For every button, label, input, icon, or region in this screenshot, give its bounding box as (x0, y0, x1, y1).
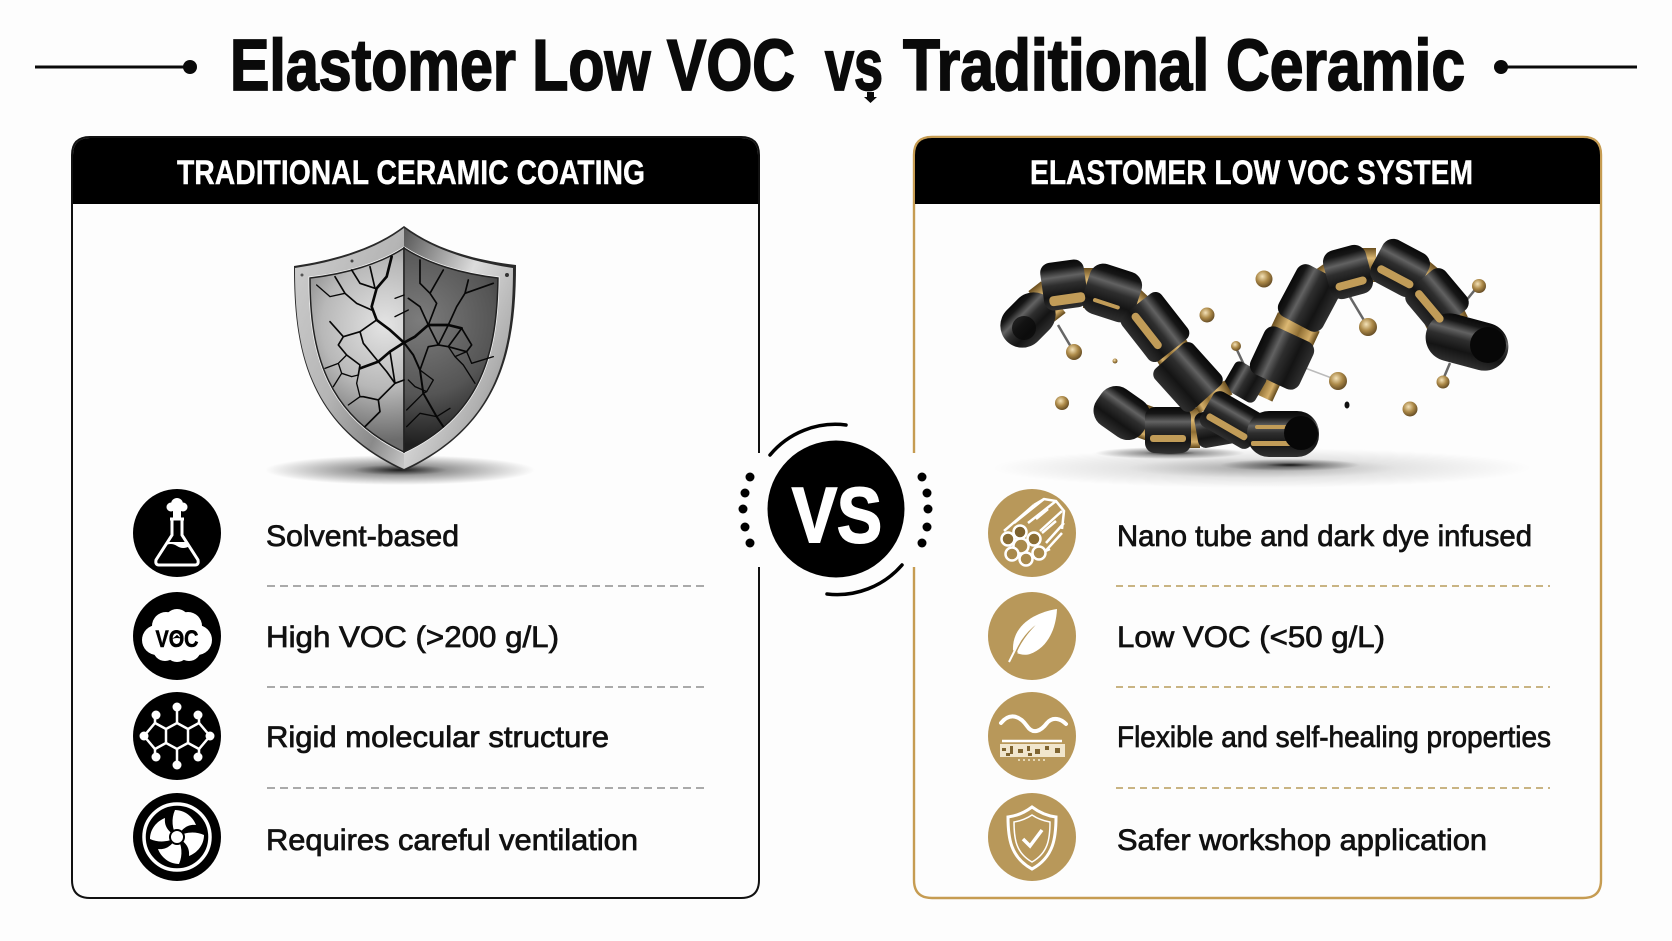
panel header: elastomer (915, 138, 1600, 204)
row: high voc: High VOC (>200 g/L) (266, 621, 559, 654)
title: Traditional Ceramic (903, 26, 1465, 106)
row: solvent-based (133, 489, 459, 577)
vs badge (738, 424, 932, 595)
icon: nano tube bundle (988, 489, 1076, 577)
divider (267, 585, 705, 587)
icon: shield check (988, 793, 1076, 881)
row: low voc (988, 592, 1385, 680)
divider (1116, 585, 1550, 587)
right chain necks (1132, 248, 1468, 448)
title (230, 26, 1465, 106)
row: requires careful ventilation (133, 793, 638, 881)
row: rigid molecular structure: Rigid molecular structure (266, 721, 609, 754)
row: flexible and self-healing (988, 692, 1551, 780)
icon: leaf (988, 592, 1076, 680)
row: low voc: Low VOC (<50 g/L) (1117, 621, 1385, 654)
left chain gold reflections (1049, 292, 1295, 446)
icon: self-healing layers (988, 692, 1076, 780)
icon: cracked shield (294, 226, 516, 471)
row: solvent-based: Solvent-based (266, 520, 459, 553)
title rule left (35, 60, 197, 74)
divider (267, 686, 705, 688)
panel: traditional ceramic coating (72, 137, 759, 898)
divider (267, 787, 705, 789)
icon: fan (133, 793, 221, 881)
molecule sticks (1058, 286, 1478, 382)
title rule right (1494, 60, 1637, 74)
row: rigid molecular structure (133, 692, 609, 780)
panel header: traditional (73, 138, 758, 204)
divider (1116, 787, 1550, 789)
left chain necks (1028, 268, 1232, 413)
illustration: elastomer polymer chain (991, 235, 1514, 457)
icon: voc cloud (133, 592, 221, 680)
row: nano tube (988, 489, 1532, 577)
right chain gold reflections (1150, 264, 1445, 442)
icon: voc cloud: VOC (156, 626, 198, 653)
title: Elastomer Low VOC (230, 26, 795, 106)
icon: flask (133, 489, 221, 577)
row: flexible and self-healing: Flexible and self-healing properties (1117, 721, 1551, 754)
row: safer workshop application (988, 793, 1487, 881)
title: vs (825, 26, 883, 106)
vs badge: VS (792, 471, 882, 559)
left chain barrels (991, 258, 1319, 457)
row: requires careful ventilation: Requires careful ventilation (266, 824, 638, 857)
row: high voc (133, 592, 559, 680)
divider (1116, 686, 1550, 688)
chain shadow (992, 447, 1532, 488)
gold balls (1055, 270, 1486, 416)
right chain barrels (1086, 235, 1514, 453)
panel header: elastomer: ELASTOMER LOW VOC SYSTEM (1030, 154, 1473, 192)
shield shadow (265, 455, 535, 485)
icon: molecule (133, 692, 221, 780)
panel: elastomer low voc system (914, 137, 1601, 898)
row: nano tube: Nano tube and dark dye infused (1117, 520, 1532, 553)
panel header: traditional: TRADITIONAL CERAMIC COATING (177, 154, 645, 192)
row: safer workshop application: Safer workshop application (1117, 824, 1487, 857)
